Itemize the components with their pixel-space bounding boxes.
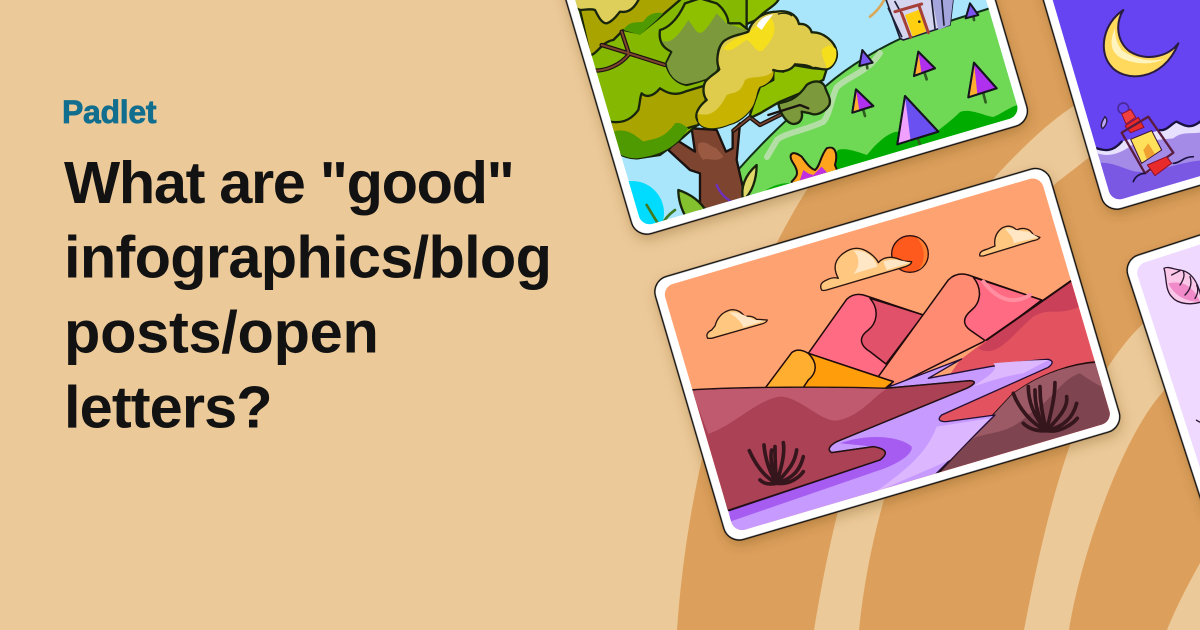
background swooshes	[677, 0, 1200, 630]
small olive clump	[778, 81, 830, 124]
branch	[595, 32, 665, 71]
red hill	[867, 282, 1110, 494]
card: seashell illustration	[1124, 234, 1200, 511]
dark hill	[938, 361, 1110, 473]
seashell	[1164, 268, 1200, 422]
mountains	[765, 274, 1042, 390]
sun	[892, 236, 928, 272]
trunk	[668, 123, 745, 215]
card: night sea illustration	[1029, 0, 1200, 227]
hill	[740, 8, 1018, 196]
river	[720, 359, 1052, 543]
small trees	[852, 3, 997, 147]
title: posts/open	[64, 298, 379, 366]
upper canopy	[575, 0, 682, 56]
mid clump	[660, 0, 748, 85]
tree	[553, 0, 837, 227]
clouds	[707, 226, 1040, 338]
bottom plants	[678, 190, 707, 218]
card: desert river illustration	[650, 167, 1127, 550]
bushes	[749, 383, 1077, 484]
sky	[664, 178, 1110, 530]
card: forest illustration	[559, 0, 1034, 245]
green under yellow	[750, 65, 827, 117]
Padlet logo: Padlet	[62, 94, 157, 130]
orange bush	[791, 148, 838, 188]
title: What are "good"	[64, 149, 514, 216]
yellow clump	[696, 11, 837, 128]
main canopy	[553, 0, 747, 158]
right branch	[731, 112, 782, 133]
moon	[1104, 10, 1178, 76]
lantern	[1118, 103, 1129, 114]
top clump	[748, 0, 780, 25]
title: infographics/blog	[64, 224, 551, 290]
waves	[1096, 123, 1200, 160]
title: letters?	[64, 374, 272, 440]
house	[870, 0, 953, 40]
left land	[690, 381, 974, 511]
